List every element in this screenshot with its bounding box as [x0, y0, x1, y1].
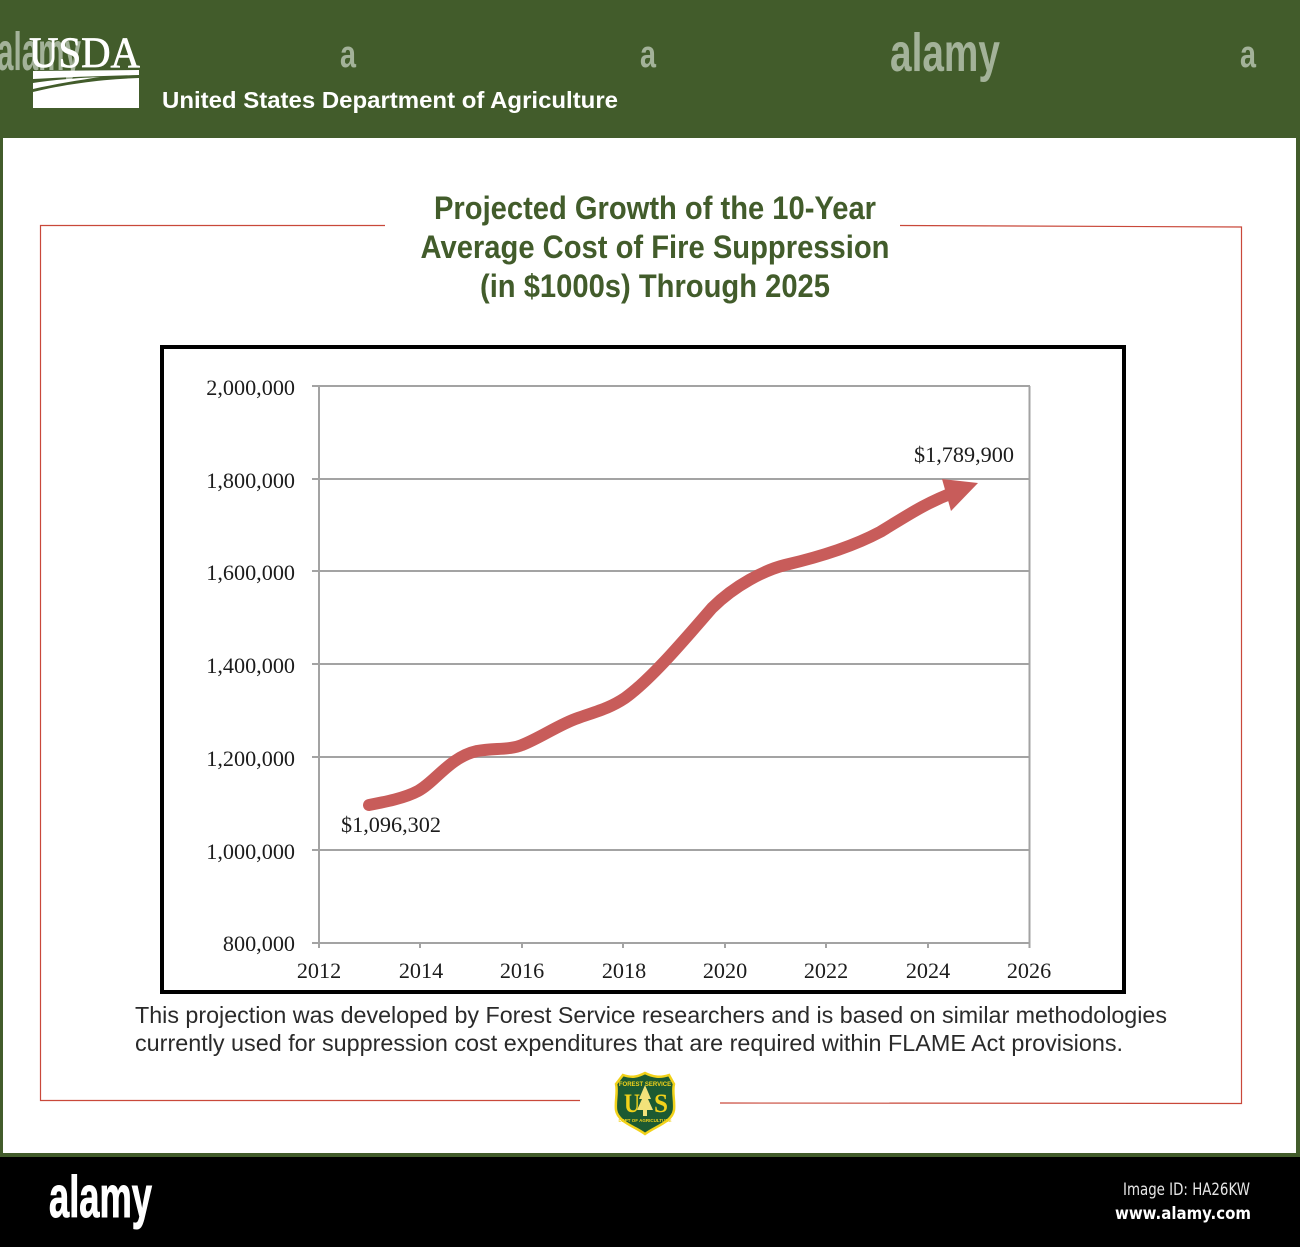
- x-axis labels: 2016: [500, 958, 544, 983]
- title: [420, 190, 890, 304]
- logo wordmark: USDA: [29, 30, 140, 77]
- alamy logo: alamy: [49, 1165, 152, 1230]
- website: www.alamy.com: [1115, 1204, 1251, 1224]
- y-axis labels: 1,400,000: [206, 653, 295, 678]
- red outline frame: [40, 226, 1242, 1104]
- header watermarks: a: [1240, 34, 1257, 76]
- x-axis labels: 2022: [804, 958, 848, 983]
- footnote text: currently used for suppression cost expenditures that are required within FLAME Act provisions.: [135, 1030, 1123, 1056]
- shield top text: FOREST SERVICE: [619, 1082, 671, 1088]
- end value label: $1,789,900: [914, 442, 1014, 467]
- header watermarks: a: [340, 34, 357, 76]
- shield bottom text: DEPT OF AGRICULTURE: [618, 1118, 672, 1123]
- title: Projected Growth of the 10-Year: [434, 190, 876, 226]
- department name: United States Department of Agriculture: [162, 87, 618, 113]
- header watermarks: a: [640, 34, 657, 76]
- logo field graphic: [33, 70, 139, 108]
- USDA logo: [29, 30, 140, 108]
- x-axis labels: 2024: [906, 958, 950, 983]
- x-axis labels: 2026: [1007, 958, 1051, 983]
- image ID: Image ID: HA26KW: [1123, 1180, 1250, 1199]
- y-axis labels: 1,600,000: [206, 560, 295, 585]
- x-axis labels: 2020: [703, 958, 747, 983]
- shield S: S: [654, 1089, 668, 1118]
- y-axis labels: 1,000,000: [206, 839, 295, 864]
- shield tree: [637, 1085, 653, 1116]
- gridlines and axes: [312, 386, 1030, 948]
- chart panel: [162, 347, 1124, 992]
- y-axis labels: 1,200,000: [206, 746, 295, 771]
- growth arrow: [369, 479, 978, 805]
- y-axis labels: [206, 375, 295, 956]
- header watermarks: alamy: [0, 22, 81, 82]
- chart border: [162, 347, 1124, 992]
- x-axis labels: 2012: [297, 958, 341, 983]
- title: Average Cost of Fire Suppression: [420, 229, 890, 265]
- title: (in $1000s) Through 2025: [480, 268, 830, 304]
- y-axis labels: 1,800,000: [206, 468, 295, 493]
- x-axis labels: [297, 958, 1051, 983]
- icon: Forest Service shield: [616, 1073, 674, 1134]
- shield U: U: [624, 1089, 640, 1118]
- header watermarks: [0, 22, 1257, 83]
- bottom black attribution bar: [0, 1157, 1300, 1247]
- x-axis labels: 2018: [602, 958, 646, 983]
- shield body: [616, 1073, 674, 1134]
- y-axis labels: 2,000,000: [206, 375, 295, 400]
- x-axis labels: 2014: [399, 958, 443, 983]
- y-axis labels: 800,000: [223, 931, 295, 956]
- header watermarks: alamy: [890, 23, 1000, 83]
- start value label: $1,096,302: [341, 812, 441, 837]
- footnote text: This projection was developed by Forest Service researchers and is based on similar methodologies: [135, 1002, 1167, 1028]
- footnote text: [135, 1002, 1167, 1056]
